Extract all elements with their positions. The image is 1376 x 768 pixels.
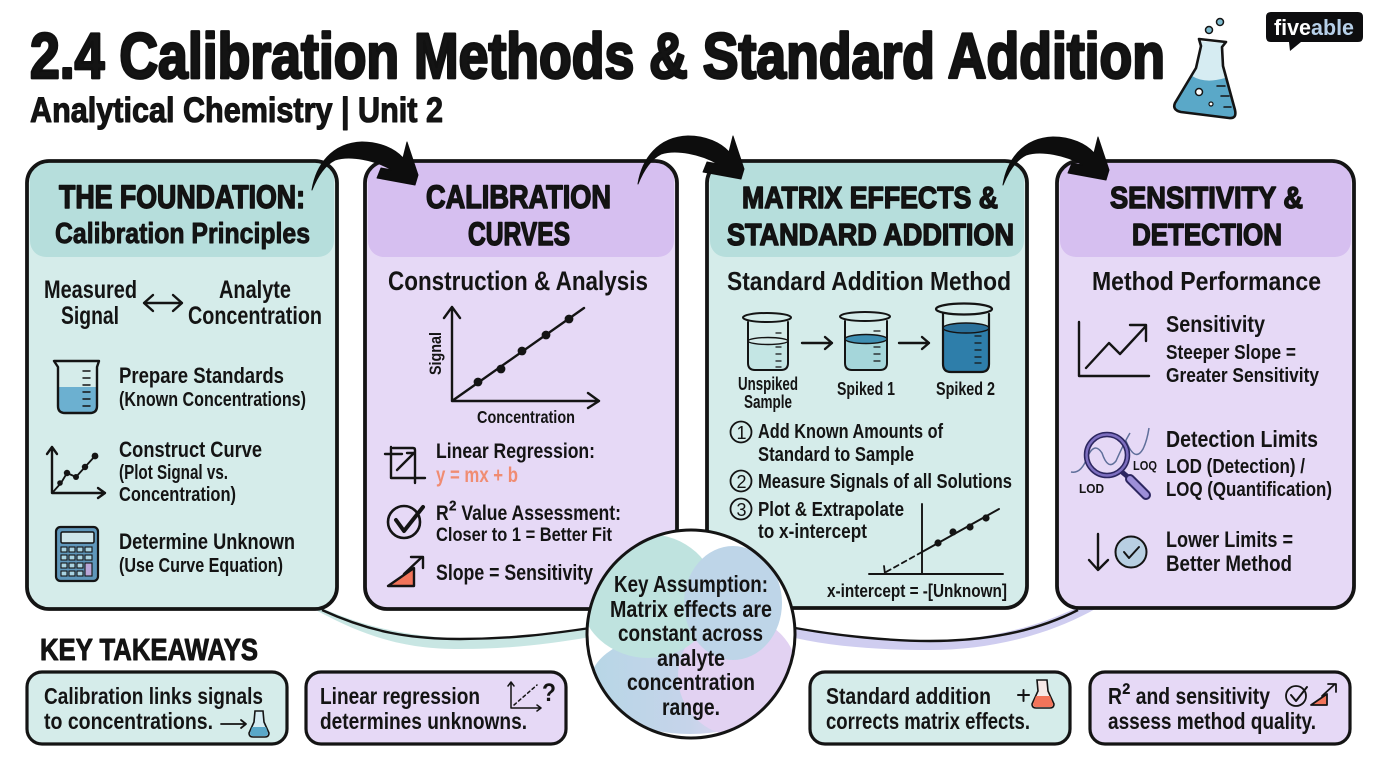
icon: graph with question mark: ? [542,679,556,707]
icon: arrow to flask [221,711,269,737]
arrow: panel 1 to panel 2 [312,142,418,190]
callout: key assumption: Key Assumption: [614,571,768,597]
beaker labels: Spiked 1 [837,379,895,399]
step: construct curve: Construct Curve [119,437,262,462]
step 1: Add Known Amounts of [758,420,943,443]
takeaway 2 [306,672,566,744]
sensitivity text: Sensitivity [1166,311,1265,337]
beaker labels [738,374,995,412]
beaker labels: Unspiked [738,374,798,394]
heading: DETECTION [1132,217,1282,252]
takeaway 3: Standard addition [826,683,991,709]
subheading: Construction & Analysis [388,266,648,296]
step 3 [730,498,904,543]
callout: key assumption: constant across [618,620,763,646]
step: construct curve: (Plot Signal vs. [119,462,228,484]
lower limits text: Lower Limits = [1166,527,1293,552]
arrow: panel 3 to panel 4 [1003,137,1109,185]
heading: CURVES [468,216,570,252]
logo: fiveable [1266,12,1363,51]
subheading: Standard Addition Method [727,266,1011,296]
arrow: panel 2 to panel 3 [638,136,744,184]
step 1: Standard to Sample [758,443,914,466]
heading [426,179,611,252]
heading: MATRIX EFFECTS & [742,180,998,215]
icon: regression [385,447,425,483]
takeaway 4: assess method quality. [1108,708,1316,734]
icon: flask [1174,18,1235,118]
detection limits text: LOQ (Quantification) [1166,478,1332,501]
step: construct curve [119,437,262,506]
beaker: unspiked [743,313,791,370]
beaker: spiked 2 [936,304,992,372]
lower limits text: Better Method [1166,551,1292,576]
panel: matrix effects and standard addition [707,161,1027,608]
takeaway 1 [27,672,287,744]
callout: key assumption: range. [662,694,720,720]
step 1 [730,420,943,466]
sensitivity text: Steeper Slope = [1166,341,1296,364]
beakers sequence [743,304,992,372]
icon: magnifier with LOD and LOQ [1071,428,1157,496]
slope text: Slope = Sensitivity [436,560,594,585]
subheading: Method Performance [1092,266,1321,296]
takeaway 3: corrects matrix effects. [826,708,1030,734]
detection limits text [1166,426,1332,501]
step: prepare standards [119,363,306,411]
step 2: Measure Signals of all Solutions [758,470,1012,493]
line chart: signal vs concentration [426,307,599,427]
beaker: spiked 1 [840,312,890,370]
icon: check and slope [1286,684,1336,706]
arrow [802,337,832,349]
heading: CALIBRATION [426,179,611,215]
signal and concentration relation: Measured [44,276,137,304]
step 1: 1 [736,423,747,443]
subtitle: Analytical Chemistry | Unit 2 [30,91,443,130]
icon: slope triangle [388,557,423,586]
icon: graph with question mark [508,679,556,711]
lower limits text [1166,527,1293,576]
step: determine unknown: Determine Unknown [119,529,295,554]
linear regression text: Linear Regression: [436,439,595,463]
step: prepare standards: Prepare Standards [119,363,284,388]
line chart: signal vs concentration: Signal [426,332,445,375]
connector: teal swoosh [312,608,590,649]
connector: purple swoosh [795,608,1097,650]
icon: beaker [54,361,99,413]
title: 2.4 Calibration Methods & Standard Addition [30,20,1165,92]
icon: plus and flask [1018,680,1054,708]
step 3: to x-intercept [758,520,867,543]
icon: calculator [56,527,98,581]
step 3: 3 [736,500,747,520]
detection limits text: Detection Limits [1166,426,1318,452]
heading: SENSITIVITY & [1110,180,1303,215]
callout: key assumption: Matrix effects are [610,596,772,622]
beaker labels: Sample [744,392,792,412]
step 3: Plot & Extrapolate [758,498,904,521]
detection limits text: LOD (Detection) / [1166,455,1305,478]
callout: key assumption [580,530,798,738]
heading [1110,180,1303,252]
callout: key assumption: concentration [627,669,755,695]
takeaway 1: Calibration links signals [44,683,263,709]
step: determine unknown [119,529,295,577]
linear regression text [436,439,595,487]
takeaway 4 [1090,672,1350,744]
step: determine unknown: (Use Curve Equation) [119,555,283,577]
step: prepare standards: (Known Concentrations) [119,389,306,411]
step 2: 2 [736,472,747,492]
r squared text: Closer to 1 = Better Fit [436,524,612,546]
takeaway 2: determines unknowns. [320,708,527,734]
r squared text: R² Value Assessment: [436,495,621,526]
sensitivity text [1166,311,1320,387]
sensitivity text: Greater Sensitivity [1166,364,1320,387]
heading: STANDARD ADDITION [727,217,1014,252]
extrapolation chart: x-intercept = -[Unknown] [827,580,1007,601]
signal and concentration relation: Signal [61,302,119,330]
heading: key takeaways: KEY TAKEAWAYS [40,632,258,667]
panel: the foundation [27,161,337,609]
signal and concentration relation: Concentration [188,302,322,330]
extrapolation chart [827,504,1007,601]
icon: rising graph [1079,322,1149,376]
connector line: right [795,610,1078,641]
connector line: left [322,610,590,639]
callout: key assumption: analyte [657,645,725,671]
linear regression text: y = mx + b [436,463,518,487]
heading [727,180,1014,252]
takeaway 2: Linear regression [320,683,480,709]
icon: down arrow and check [1089,534,1146,570]
takeaway 1: to concentrations. [44,708,213,734]
heading: Calibration Principles [55,218,310,250]
panel: sensitivity and detection [1057,161,1354,608]
takeaway 4: R² and sensitivity [1108,678,1270,711]
icon: check circle [388,506,423,538]
icon: magnifier with LOD and LOQ: LOQ [1133,459,1157,473]
step: construct curve: Concentration) [119,484,236,506]
signal and concentration relation [44,276,322,330]
heading [55,179,310,250]
line chart: signal vs concentration: Concentration [477,407,575,427]
arrow [899,337,929,349]
icon: magnifier with LOD and LOQ: LOD [1079,482,1104,496]
signal and concentration relation: Analyte [219,276,291,304]
beaker labels: Spiked 2 [936,379,995,399]
logo: fiveable: fiveable [1274,15,1354,40]
takeaway 3 [810,672,1070,744]
panel: calibration curves [365,161,677,609]
r squared text [436,495,621,546]
icon: curve graph [47,447,105,498]
heading: THE FOUNDATION: [59,179,305,215]
